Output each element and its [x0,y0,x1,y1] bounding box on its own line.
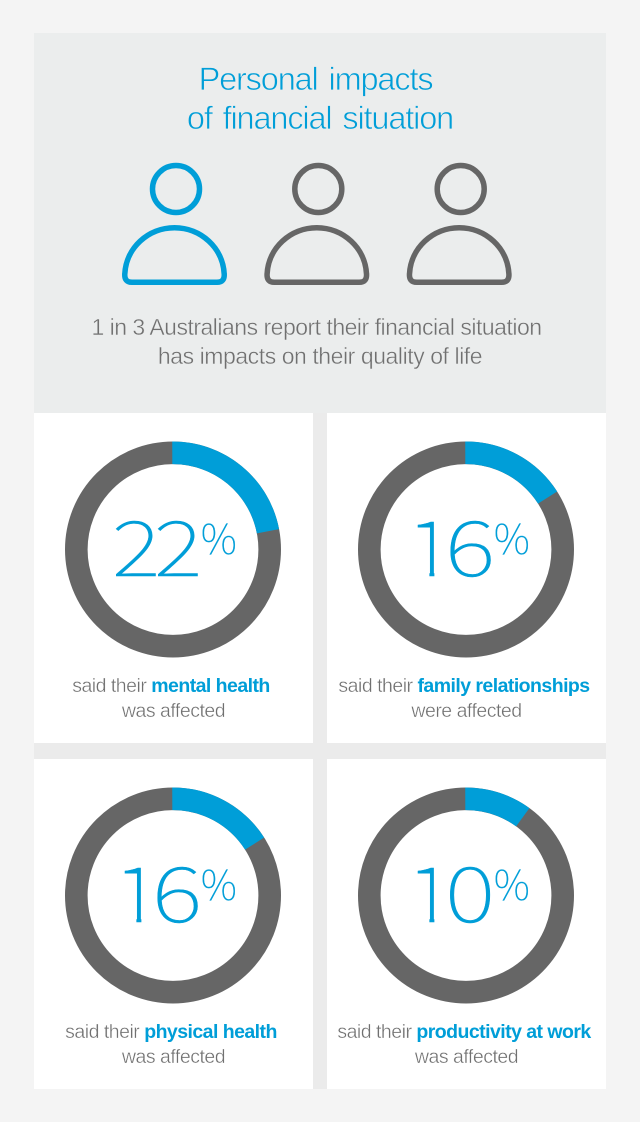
caption: were affected [411,700,522,722]
stat 10%: 1 [405,834,455,944]
stat 16%: 1 [112,834,162,944]
caption [338,675,590,722]
stat 10%: 0 [445,834,495,944]
caption: was affected [415,1046,518,1068]
caption: said their productivity at work [337,1021,591,1043]
stat 22% [112,488,237,598]
title: Personal impacts [199,61,432,97]
stat 16%: % [494,506,530,566]
stat 16%: 1 [405,488,455,598]
stat 22%: % [201,506,237,566]
icon: person grey [409,166,509,282]
donut chart 22% [65,442,281,658]
title: of financial situation [187,100,453,136]
stat 16%: 6 [152,834,202,944]
icon: person grey [267,166,367,282]
caption [72,675,270,722]
people icons [122,162,512,285]
stat 16%: % [201,852,237,912]
panel: productivity at work [327,759,606,1089]
icon: person highlighted [125,166,224,282]
stat 16% [418,488,530,598]
caption [337,1021,592,1068]
stat 16%: 6 [445,488,495,598]
panel: mental health [34,413,313,743]
intro text: has impacts on their quality of life [158,343,482,369]
intro text: 1 in 3 Australians report their financial situation [91,314,542,340]
panel: physical health [34,759,313,1089]
caption: said their family relationships [338,675,590,697]
donut chart 10% [358,788,574,1004]
donut chart 16% [65,788,281,1004]
caption: said their mental health [72,675,270,697]
panel: family relationships [327,413,606,743]
caption: was affected [122,700,225,722]
donut chart 16% [358,442,574,658]
caption [65,1021,277,1068]
stat 22%: 2 [154,488,202,598]
stat 22%: 2 [112,488,160,598]
stat 10%: % [494,852,530,912]
title [187,61,453,136]
stat 16% [124,834,237,944]
intro text [91,314,542,369]
caption: said their physical health [65,1021,277,1043]
caption: was affected [122,1046,225,1068]
panel: header [34,33,606,413]
stat 10% [418,834,530,944]
